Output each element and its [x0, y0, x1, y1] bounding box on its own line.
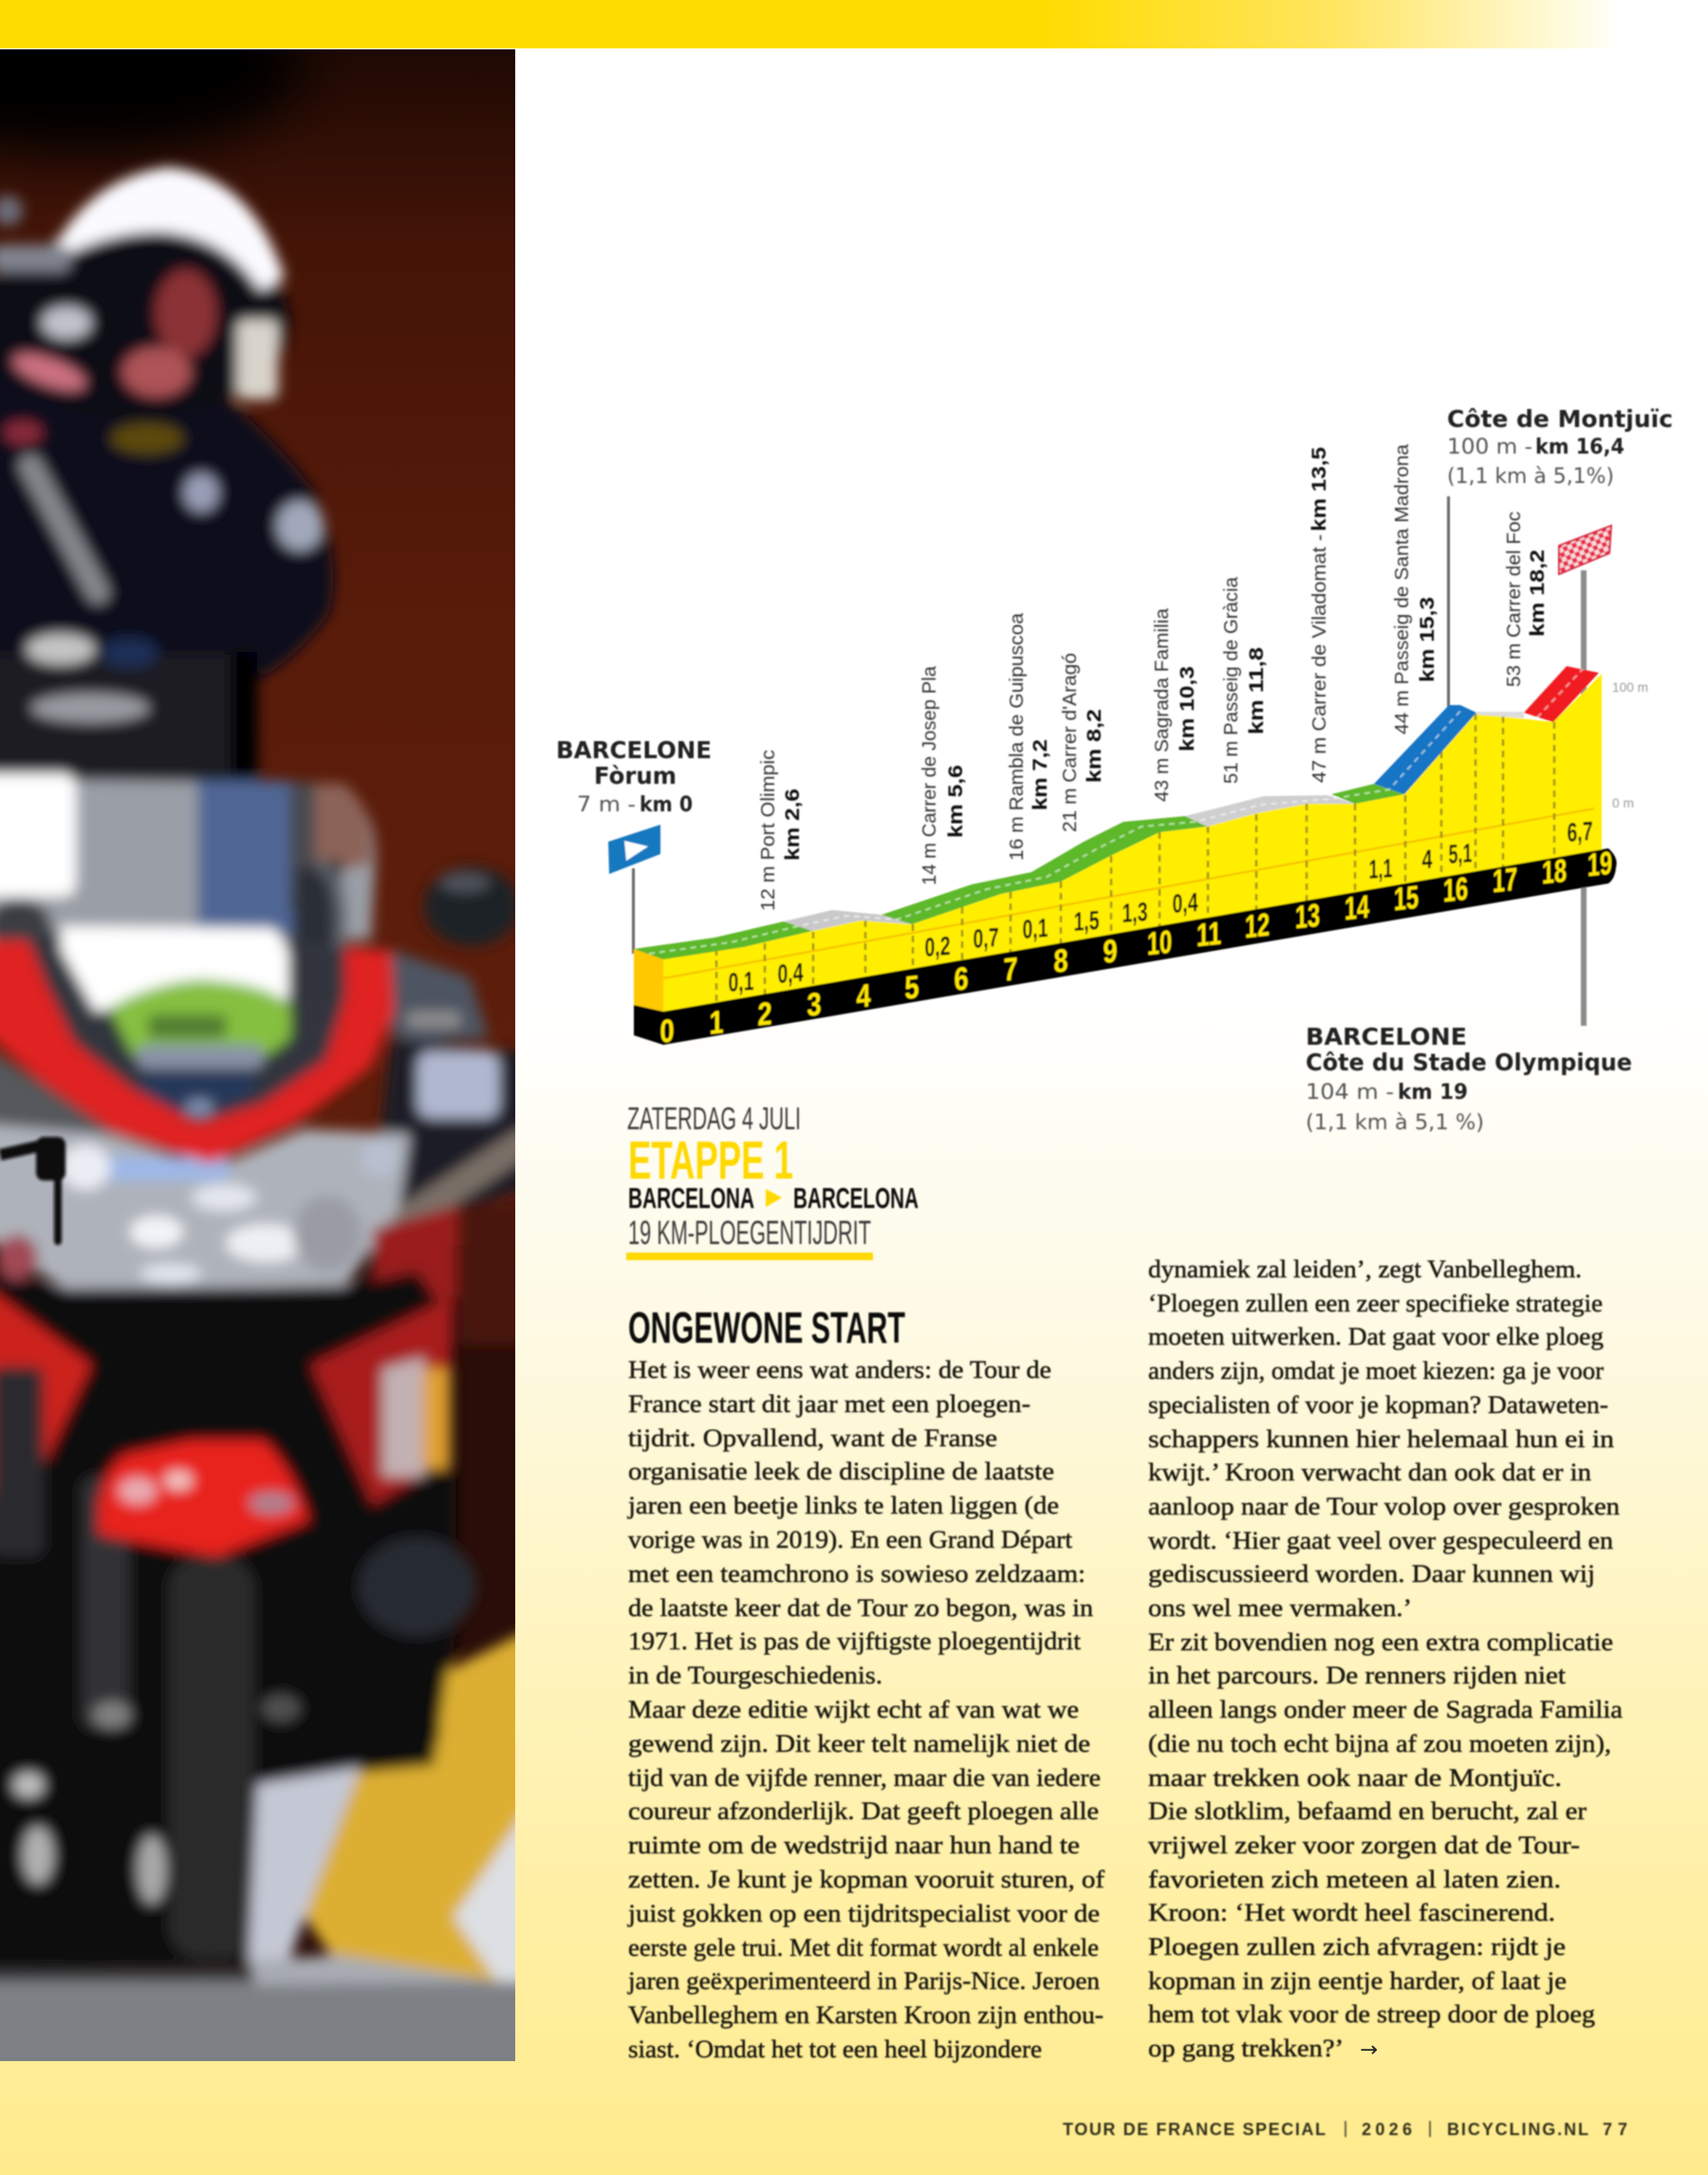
gradient percentages: 0,7	[974, 922, 998, 954]
rotated route point labels: km 5,6	[945, 765, 967, 838]
gradient percentages: 1,5	[1074, 905, 1099, 937]
article text column 1: de laatste keer dat de Tour zo begon, was in	[628, 1594, 1093, 1622]
article text column 2: Kroon: ‘Het wordt heel fascinerend.	[1148, 1899, 1555, 1926]
stage profile chart	[608, 496, 1648, 1050]
rotated route point labels: 16 m Rambla de Guipuscoa	[1007, 612, 1028, 861]
article text column 1: 1971. Het is pas de vijftigste ploegentijdrit	[628, 1627, 1082, 1655]
km numbers: 8	[1053, 942, 1068, 980]
gradient percentages: 6,7	[1568, 816, 1592, 847]
article text column 2: Er zit bovendien nog een extra complicatie	[1148, 1628, 1613, 1656]
article text column 2: ons wel mee vermaken.’	[1148, 1594, 1412, 1622]
km numbers: 1	[710, 1004, 723, 1042]
finish label: km 19	[1398, 1081, 1468, 1105]
article text column 1: jaren een beetje links te laten liggen (de	[627, 1492, 1059, 1519]
article text column 1: zetten. Je kunt je kopman vooruit sturen, of	[628, 1866, 1105, 1893]
gradient percentages: 0,1	[1023, 913, 1048, 944]
stage header	[626, 1101, 919, 1260]
article text column 2: Die slotklim, befaamd en berucht, zal er	[1148, 1797, 1587, 1825]
article text column 1: Vanbelleghem en Karsten Kroon zijn enthou-	[628, 2001, 1104, 2029]
km dashed lines	[716, 714, 1554, 1006]
article text column 1: jaren geëxperimenteerd in Parijs-Nice. Jeroen	[627, 1967, 1100, 1995]
rotated route point labels: km 15,3	[1417, 597, 1439, 682]
article text column 1: Maar deze editie wijkt echt af van wat we	[628, 1696, 1079, 1723]
article text column 2: favorieten zich meteen al laten zien.	[1148, 1866, 1561, 1893]
route: BARCELONA	[793, 1181, 919, 1215]
article text column 2: ‘Ploegen zullen een zeer specifieke strategie	[1148, 1290, 1603, 1317]
gradient percentages: 1,1	[1369, 853, 1392, 884]
brake lever	[0, 1137, 65, 1241]
footer: BICYCLING.NL	[1447, 2120, 1588, 2139]
start label: Fòrum	[594, 762, 677, 790]
distance and type: 19 KM-PLOEGENTIJDRIT	[628, 1215, 871, 1252]
article text column 1: France start dit jaar met een ploegen-	[628, 1390, 1030, 1418]
article text column 2: anders zijn, omdat je moet kiezen: ga je voor	[1148, 1357, 1604, 1385]
article heading: ONGEWONE START	[628, 1303, 905, 1352]
gradient percentages	[729, 816, 1592, 997]
article text column 2: kopman in zijn eentje harder, of laat je	[1148, 1967, 1567, 1995]
rotated route point labels: 47 m Carrer de Viladomat -	[1309, 534, 1330, 783]
footer: 77	[1603, 2120, 1627, 2139]
article text column 2: aanloop naar de Tour volop over gesproken	[1148, 1493, 1620, 1520]
rotated route point labels: km 2,6	[782, 789, 804, 861]
road markings	[249, 1767, 361, 1974]
article text column 2: vrijwel zeker voor zorgen dat de Tour-	[1148, 1831, 1580, 1859]
rotated route point labels: km 8,2	[1084, 709, 1105, 783]
article text column 2: moeten uitwerken. Dat gaat voor elke ploeg	[1148, 1323, 1604, 1350]
km numbers: 17	[1493, 862, 1517, 900]
rotated route point labels: 43 m Sagrada Familia	[1152, 607, 1173, 802]
start flag	[608, 825, 660, 954]
road: green segment start	[634, 921, 812, 959]
gradient percentages: 5,1	[1449, 838, 1472, 869]
rotated route point labels: 53 m Carrer del Foc	[1504, 511, 1525, 687]
article text column 2: dynamiek zal leiden’, zegt Vanbelleghem.	[1148, 1255, 1582, 1283]
km numbers: 13	[1295, 898, 1320, 936]
finish label: Côte du Stade Olympique	[1306, 1049, 1632, 1076]
climb label: Cote de Montjuic	[1447, 405, 1673, 489]
km numbers: 3	[807, 986, 822, 1024]
article text column 1: organisatie leek de discipline de laatste	[628, 1458, 1054, 1485]
date: ZATERDAG 4 JULI	[627, 1101, 801, 1136]
gradient percentages: 4	[1421, 845, 1433, 874]
article text column 1: juist gokken op een tijdritspecialist voor de	[627, 1900, 1100, 1927]
surrounding fairing	[391, 950, 489, 1044]
article text column 1: met een teamchrono is sowieso zeldzaam:	[628, 1560, 1086, 1588]
Montjuic marker line	[1447, 496, 1450, 707]
finish pole	[1581, 570, 1587, 1026]
stage title: ETAPPE 1	[628, 1130, 793, 1191]
article text column 2: hem tot vlak voor de streep door de ploeg	[1148, 2000, 1595, 2028]
icon: continuation arrow: →	[1360, 2038, 1378, 2062]
article text column 1: vorige was in 2019). En een Grand Départ	[628, 1526, 1073, 1553]
rotated route point labels	[758, 443, 1549, 911]
footer	[1063, 2120, 1627, 2139]
yellow terrain body	[663, 674, 1602, 1015]
elevation axis labels	[1612, 679, 1648, 810]
finish label	[1306, 1023, 1632, 1135]
km numbers: 12	[1245, 907, 1270, 945]
article text column 2: Ploegen zullen zich afvragen: rijdt je	[1148, 1933, 1566, 1961]
article text column 2: op gang trekken?’	[1148, 2035, 1344, 2062]
article text column 2: schappers kunnen hier helemaal hun ei in	[1148, 1425, 1614, 1453]
headlight	[0, 1124, 410, 1291]
start label: BARCELONE	[556, 736, 712, 764]
km numbers: 0	[660, 1013, 674, 1050]
ground	[0, 1970, 256, 1983]
windshield	[0, 779, 376, 949]
km numbers: 16	[1443, 871, 1468, 909]
km numbers	[660, 846, 1612, 1050]
article text column 2: kwijt.’ Kroon verwacht dan ook dat er in	[1148, 1459, 1591, 1486]
rotated route point labels: 14 m Carrer de Josep Pla	[919, 665, 940, 885]
rotated route point labels: 44 m Passeig de Santa Madrona	[1392, 443, 1413, 734]
route	[628, 1181, 919, 1215]
article text column 1: ruimte om de wedstrijd naar hun hand te	[628, 1831, 1080, 1859]
footer: 2026	[1362, 2120, 1412, 2139]
article text column 1: siast. ‘Omdat het tot een heel bijzondere	[628, 2036, 1042, 2063]
left side face	[634, 949, 663, 1012]
km numbers: 18	[1542, 853, 1567, 891]
road: grey segment 2	[1185, 795, 1355, 827]
km numbers: 10	[1147, 924, 1172, 962]
article text column 1: coureur afzonderlijk. Dat geeft ploegen alle	[628, 1797, 1099, 1825]
road centre dashes	[649, 669, 1583, 954]
elevation axis labels: 0 m	[1612, 795, 1634, 810]
start label	[556, 736, 712, 817]
finish label: 104 m -	[1306, 1081, 1394, 1105]
top yellow band	[0, 0, 1708, 48]
start label: km 0	[640, 793, 693, 817]
elevation reference line	[663, 809, 1594, 978]
road: grey segment 1	[784, 910, 912, 931]
rider body	[0, 354, 342, 686]
climb label: Cote de Montjuic: Côte de Montjuïc	[1447, 405, 1673, 433]
finish flag	[1559, 526, 1611, 574]
rotated route point labels: km 10,3	[1177, 666, 1198, 752]
article text column 2	[1148, 1255, 1623, 2062]
km numbers: 15	[1394, 880, 1419, 918]
lower machine	[453, 1200, 515, 1349]
climb label: Cote de Montjuic: km 16,4	[1535, 436, 1624, 459]
gradient percentages: 0,4	[1173, 887, 1198, 919]
article text column 2: in het parcours. De renners rijden niet	[1148, 1662, 1567, 1689]
gradient percentages: 1,3	[1122, 897, 1148, 928]
km numbers: 4	[856, 977, 871, 1015]
helmet dark shell	[0, 228, 289, 418]
footer: TOUR DE FRANCE SPECIAL	[1063, 2120, 1326, 2139]
road: red final climb	[1524, 666, 1599, 722]
rotated route point labels: 21 m Carrer d'Aragó	[1060, 653, 1081, 832]
red V fairing band	[0, 943, 391, 1161]
article text column 2: gediscussieerd worden. Daar kunnen wij	[1148, 1560, 1595, 1588]
start label: 7 m -	[577, 793, 636, 817]
finish label: BARCELONE	[1306, 1023, 1467, 1050]
km numbers: 6	[955, 960, 968, 998]
fairing inner	[27, 930, 348, 1126]
rotated route point labels: km 7,2	[1030, 739, 1051, 810]
article text column 1: tijd van de vijfde renner, maar die van iedere	[628, 1764, 1101, 1792]
route: BARCELONA	[628, 1181, 754, 1215]
road: green segment 3	[1331, 784, 1404, 804]
km numbers: 5	[905, 969, 919, 1007]
rotated route point labels: 51 m Passeig de Gràcia	[1221, 576, 1242, 784]
article text column 1: eerste gele trui. Met dit format wordt al enkele	[628, 1934, 1099, 1961]
climb label: Cote de Montjuic: 100 m -	[1447, 436, 1532, 459]
article text column 2: (die nu toch echt bijna af zou moeten zijn),	[1148, 1730, 1611, 1757]
gradient percentages: 0,4	[778, 957, 804, 989]
km numbers: 7	[1004, 951, 1017, 989]
km numbers: 9	[1103, 933, 1118, 971]
rotated route point labels: km 11,8	[1246, 647, 1268, 734]
yellow rule	[626, 1253, 873, 1260]
rotated route point labels: km 18,2	[1527, 549, 1549, 637]
km numbers: 2	[757, 995, 772, 1033]
km numbers: 11	[1197, 916, 1221, 954]
rotated route point labels: 12 m Port Olimpic	[758, 750, 779, 911]
gradient percentages: 0,2	[924, 931, 951, 962]
km numbers: 19	[1587, 846, 1612, 883]
finish label: (1,1 km à 5,1 %)	[1306, 1111, 1484, 1135]
rotated route point labels: km 13,5	[1309, 447, 1330, 531]
article text column 2: alleen langs onder meer de Sagrada Familia	[1148, 1696, 1623, 1723]
black km band	[634, 848, 1617, 1045]
road: green segment middle	[882, 816, 1207, 924]
photo: motorcycle and rider	[0, 0, 536, 2086]
climb label: Cote de Montjuic: (1,1 km à 5,1%)	[1447, 465, 1614, 489]
elevation axis labels: 100 m	[1612, 679, 1648, 695]
road: blue climb	[1374, 705, 1476, 794]
road: grey segment 3	[1476, 712, 1524, 718]
gradient percentages: 0,1	[729, 966, 753, 997]
article text column 2: maar trekken ook naar de Montjuïc.	[1148, 1764, 1562, 1792]
article text column 1: tijdrit. Opvallend, want de Franse	[628, 1424, 997, 1452]
article text column 1	[627, 1356, 1105, 2063]
article text column 1: gewend zijn. Dit keer telt namelijk niet de	[628, 1730, 1090, 1757]
km numbers: 14	[1345, 889, 1369, 927]
article text column 2: wordt. ‘Hier gaat veel over gespeculeerd en	[1148, 1527, 1613, 1554]
article text column 2: specialisten of voor je kopman? Dataweten-	[1148, 1391, 1608, 1419]
article text column 1: Het is weer eens wat anders: de Tour de	[628, 1356, 1051, 1384]
article text column 1: in de Tourgeschiedenis.	[628, 1662, 882, 1689]
